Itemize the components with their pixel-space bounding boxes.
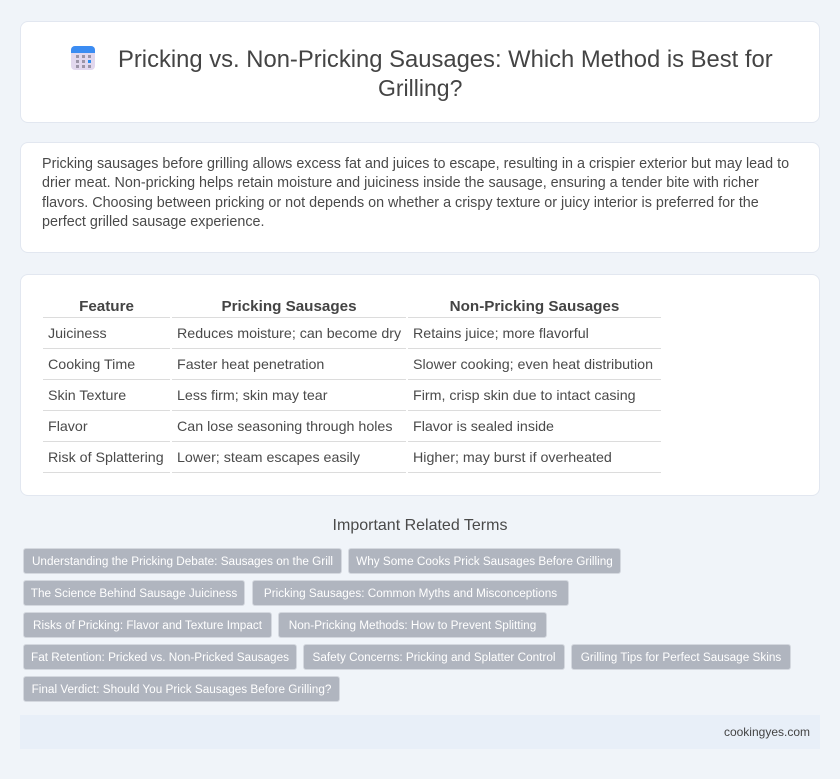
title: Grilling?: [378, 75, 462, 101]
tag: Safety Concerns: Pricking and Splatter Control: [313, 651, 555, 664]
flavor non-pricking: Flavor is sealed inside: [413, 419, 554, 435]
tag: [348, 548, 621, 574]
tag: [252, 580, 569, 606]
tag: [23, 612, 272, 638]
summary text: Pricking sausages before grilling allows excess fat and juices to escape, resulting in a crispier exterior but may lead to: [42, 156, 789, 172]
juiciness pricking: Reduces moisture; can become dry: [177, 326, 401, 342]
tag: Risks of Pricking: Flavor and Texture Impact: [33, 619, 262, 632]
footer source: cookingyes.com: [724, 725, 810, 739]
comparison table: [43, 317, 661, 473]
related terms heading: Important Related Terms: [333, 517, 507, 534]
skin texture non-pricking: Firm, crisp skin due to intact casing: [413, 388, 636, 404]
icon: calendar: [71, 46, 95, 70]
tag: Final Verdict: Should You Prick Sausages Before Grilling?: [32, 683, 331, 696]
splattering non-pricking: Higher; may burst if overheated: [413, 450, 612, 466]
skin texture pricking: Less firm; skin may tear: [177, 388, 327, 404]
tag: Why Some Cooks Prick Sausages Before Grilling: [356, 555, 613, 568]
tag: [23, 580, 245, 606]
panel: comparison table: [20, 274, 820, 496]
tag: Pricking Sausages: Common Myths and Misconceptions: [264, 587, 557, 600]
table header: pricking: Pricking Sausages: [221, 298, 357, 315]
title: Pricking vs. Non-Pricking Sausages: Which Method is Best for: [118, 46, 773, 73]
tag: Non-Pricking Methods: How to Prevent Splitting: [289, 619, 536, 632]
title: [118, 46, 773, 101]
summary text: flavors. Choosing between pricking or not depends on whether a crispy texture or juicy interior is preferred for the: [42, 194, 759, 210]
panel: summary paragraph: [20, 142, 820, 253]
tag: [571, 644, 791, 670]
row: juiciness: Juiciness: [48, 326, 107, 342]
tag: [23, 644, 297, 670]
row: risk of splattering: Risk of Splattering: [48, 450, 164, 466]
summary text: drier meat. Non-pricking helps retain moisture and juiciness inside the sausage, ensuring a tender bite with richer: [42, 175, 759, 191]
row: cooking time: Cooking Time: [48, 357, 135, 373]
flavor pricking: Can lose seasoning through holes: [177, 419, 392, 435]
tag: Grilling Tips for Perfect Sausage Skins: [581, 651, 781, 664]
tag: Fat Retention: Pricked vs. Non-Pricked Sausages: [31, 651, 289, 664]
table header: feature: Feature: [79, 298, 134, 315]
tag: [23, 676, 340, 702]
panel: header: [20, 21, 820, 123]
splattering pricking: Lower; steam escapes easily: [177, 450, 360, 466]
tag: [23, 548, 342, 574]
tag: Understanding the Pricking Debate: Sausages on the Grill: [32, 555, 333, 568]
tag: [278, 612, 547, 638]
footer bar: [20, 715, 820, 749]
juiciness non-pricking: Retains juice; more flavorful: [413, 326, 589, 342]
cooking time non-pricking: Slower cooking; even heat distribution: [413, 357, 653, 373]
tag: The Science Behind Sausage Juiciness: [31, 587, 237, 600]
cooking time pricking: Faster heat penetration: [177, 357, 324, 373]
summary text: [42, 156, 789, 230]
row: skin texture: Skin Texture: [48, 388, 126, 404]
tag: [303, 644, 565, 670]
table header: non-pricking: Non-Pricking Sausages: [450, 298, 619, 315]
row: flavor: Flavor: [48, 419, 88, 435]
summary text: perfect grilled sausage experience.: [42, 214, 264, 230]
